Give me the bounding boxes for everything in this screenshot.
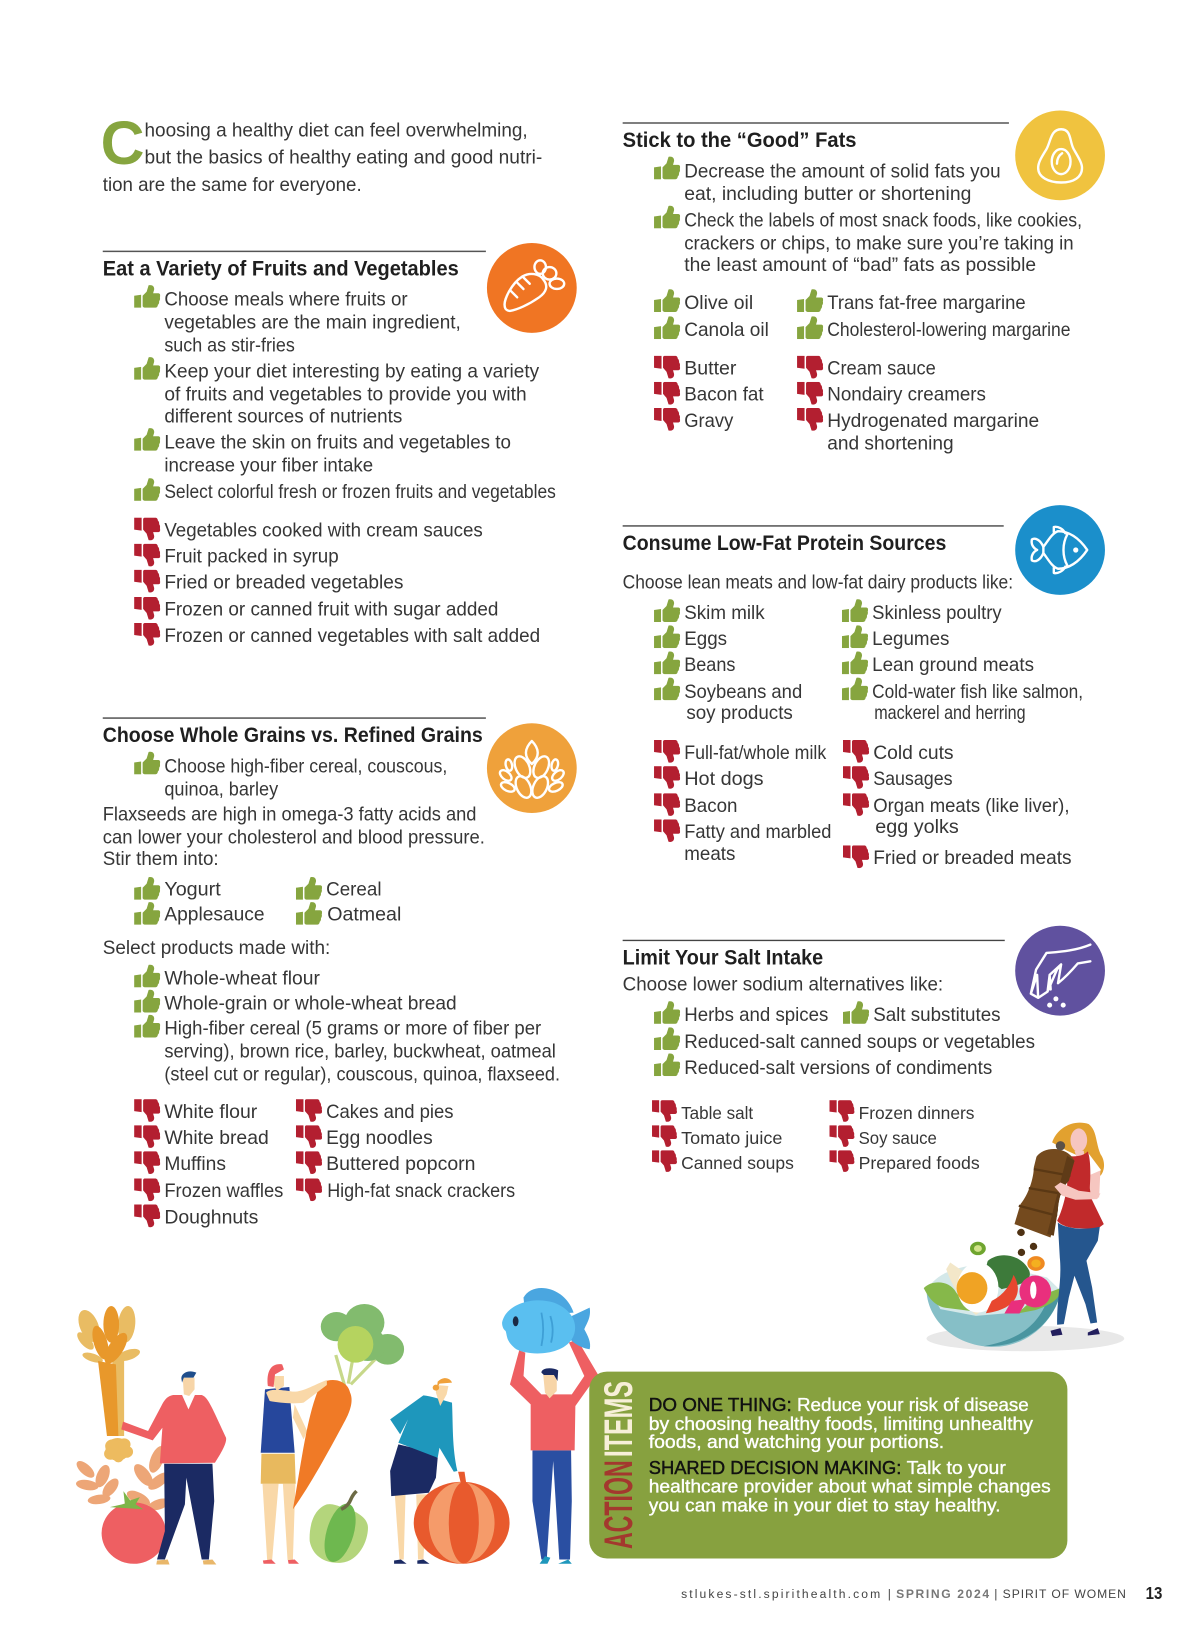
thumbs-up item: serving), brown rice, barley, buckwheat, oatmeal xyxy=(164,1041,556,1062)
thumbs-down item: Fried or breaded vegetables xyxy=(164,573,403,594)
thumbs-up item: such as stir-fries xyxy=(164,336,295,357)
thumbs-up item: of fruits and vegetables to provide you with xyxy=(164,385,527,406)
thumbs-down item xyxy=(134,1178,283,1202)
thumbs-up item: Choose high-fiber cereal, couscous, xyxy=(164,756,447,777)
thumbs-up item xyxy=(134,902,265,926)
thumbs-up item xyxy=(654,206,1082,276)
thumbs-down item xyxy=(654,408,734,432)
thumbs-down item: Cakes and pies xyxy=(326,1102,454,1123)
thumbs-up item: crackers or chips, to make sure you’re taking in xyxy=(684,233,1074,254)
thumbs-down item: Butter xyxy=(684,359,737,380)
thumbs-up item xyxy=(134,428,511,477)
thumbs-up item: Decrease the amount of solid fats you xyxy=(684,161,1001,182)
thumbs-down item: meats xyxy=(684,844,735,865)
text block: do one thing: Reduce your risk of disease xyxy=(797,1394,1029,1415)
footer: 13 xyxy=(1146,1583,1162,1603)
panel: whole grains xyxy=(103,718,577,1228)
vertical label: action items: ITEMS xyxy=(597,1381,641,1457)
thumbs-down item: Table salt xyxy=(681,1103,753,1123)
thumbs-down item xyxy=(797,408,1039,455)
thumbs-up item xyxy=(134,357,540,428)
thumbs-up item: Applesauce xyxy=(164,905,265,926)
thumbs-down item: Muffins xyxy=(164,1154,226,1175)
thumbs-up item: Canola oil xyxy=(684,320,769,341)
thumbs-down item xyxy=(654,740,827,764)
thumbs-down item xyxy=(654,356,737,380)
text: select products: Select products made with: xyxy=(103,938,330,959)
footer: stlukes-stl.spirithealth.com | xyxy=(681,1587,891,1601)
thumbs-down item xyxy=(797,356,936,380)
text block: flaxseeds: Flaxseeds are high in omega-3 fatty acids and xyxy=(103,804,476,825)
icon: carrot badge xyxy=(487,243,577,333)
thumbs-up item: Lean ground meats xyxy=(872,655,1034,676)
thumbs-down item: Cold cuts xyxy=(873,743,954,764)
intro text with drop cap: C xyxy=(101,109,145,178)
icon: hand pinching salt badge xyxy=(1015,926,1105,1016)
thumbs-down item xyxy=(654,382,764,406)
text block: do one thing: DO ONE THING: xyxy=(649,1394,792,1415)
text block: shared decision making: healthcare provider about what simple changes xyxy=(649,1476,1051,1497)
thumbs-down item: High-fat snack crackers xyxy=(327,1181,515,1202)
thumbs-up item xyxy=(134,1015,560,1085)
icon: fish badge xyxy=(1015,505,1105,595)
thumbs-down item: Doughnuts xyxy=(164,1207,258,1228)
thumbs-down item: Fruit packed in syrup xyxy=(164,546,339,567)
thumbs-up item: Skinless poultry xyxy=(872,603,1002,624)
illustration: salad bowl xyxy=(924,1229,1124,1351)
thumbs-up item: Check the labels of most snack foods, like cookies, xyxy=(684,210,1082,231)
thumbs-down item xyxy=(654,766,764,790)
intro text with drop cap: but the basics of healthy eating and good nutri- xyxy=(145,148,542,169)
thumbs-down item: White bread xyxy=(164,1128,269,1149)
thumbs-up item xyxy=(654,678,802,724)
thumbs-up item: soy products xyxy=(686,703,793,724)
thumbs-up item xyxy=(296,877,381,901)
illustration: man with wheat xyxy=(74,1305,226,1564)
text block: do one thing: foods, and watching your portions. xyxy=(649,1431,944,1452)
thumbs-up item: Cold-water fish like salmon, xyxy=(872,682,1083,703)
thumbs-up item: Skim milk xyxy=(684,603,765,624)
thumbs-up item xyxy=(842,678,1083,724)
thumbs-down item xyxy=(654,819,831,865)
thumbs-up item xyxy=(842,599,1002,624)
thumbs-up item: Leave the skin on fruits and vegetables to xyxy=(164,433,511,454)
footer xyxy=(681,1583,1162,1603)
thumbs-up item: Reduced-salt versions of condiments xyxy=(684,1058,992,1079)
thumbs-down item: Organ meats (like liver), xyxy=(873,796,1069,817)
text block: shared decision making: Talk to your xyxy=(907,1457,1006,1478)
panel: limit salt xyxy=(623,926,1105,1173)
thumbs-down item xyxy=(134,1205,258,1228)
thumbs-up item: the least amount of “bad” fats as possible xyxy=(684,255,1036,276)
text block: do one thing: by choosing healthy foods, limiting unhealthy xyxy=(649,1413,1034,1434)
thumbs-down item: Bacon fat xyxy=(684,385,764,406)
illustration: pepper xyxy=(310,1491,368,1565)
thumbs-down item: Hot dogs xyxy=(684,769,764,790)
icon: avocado badge xyxy=(1015,110,1105,200)
thumbs-up item xyxy=(654,652,735,676)
thumbs-up item xyxy=(843,1001,1001,1026)
thumbs-up item: Cereal xyxy=(326,880,381,901)
thumbs-up item: increase your fiber intake xyxy=(164,456,373,477)
thumbs-down item xyxy=(134,1151,226,1175)
thumbs-down item: Buttered popcorn xyxy=(326,1154,475,1175)
panel: good fats xyxy=(623,110,1105,455)
thumbs-up item xyxy=(296,902,401,926)
thumbs-up item: Soybeans and xyxy=(684,682,802,703)
thumbs-down item xyxy=(134,1099,258,1123)
thumbs-up item: Legumes xyxy=(872,629,949,650)
vertical label: action items: ACTION xyxy=(597,1460,641,1549)
heading: whole grains: Choose Whole Grains vs. Refined Grains xyxy=(103,723,483,747)
thumbs-down item: and shortening xyxy=(827,434,954,455)
thumbs-up item xyxy=(654,625,727,650)
panel: action items xyxy=(589,1372,1067,1558)
thumbs-down item: White flour xyxy=(164,1102,258,1123)
illustration: man holding fish xyxy=(502,1288,598,1564)
thumbs-down item: Soy sauce xyxy=(859,1128,937,1148)
thumbs-up item xyxy=(134,752,447,800)
thumbs-down item: egg yolks xyxy=(875,817,959,838)
intro text with drop cap: hoosing a healthy diet can feel overwhelming, xyxy=(145,121,528,142)
thumbs-down item xyxy=(829,1100,974,1123)
thumbs-down item: Cream sauce xyxy=(827,359,936,380)
thumbs-up item: quinoa, barley xyxy=(164,779,279,800)
thumbs-up item: Olive oil xyxy=(684,293,753,314)
thumbs-down item: Frozen or canned fruit with sugar added xyxy=(164,600,498,621)
thumbs-up item xyxy=(842,625,949,650)
thumbs-up item: different sources of nutrients xyxy=(164,407,402,428)
thumbs-down item: Fried or breaded meats xyxy=(873,848,1072,869)
thumbs-up item: Trans fat-free margarine xyxy=(827,293,1026,314)
thumbs-up item: Eggs xyxy=(684,629,727,650)
thumbs-up item: Cholesterol-lowering margarine xyxy=(827,320,1071,341)
heading: protein: Consume Low-Fat Protein Sources xyxy=(623,531,946,555)
text block: flaxseeds: can lower your cholesterol and blood pressure. xyxy=(103,827,485,848)
illustration: woman with pumpkin xyxy=(390,1378,510,1564)
thumbs-down item xyxy=(843,740,954,764)
thumbs-down item xyxy=(843,793,1069,838)
thumbs-up item: Salt substitutes xyxy=(873,1005,1001,1026)
thumbs-down item xyxy=(652,1150,794,1173)
icon: grain badge xyxy=(487,723,577,813)
text: sodium intro: Choose lower sodium alternatives like: xyxy=(623,975,943,996)
thumbs-down item: Frozen waffles xyxy=(164,1181,283,1202)
illustration: woman with carrot xyxy=(261,1304,404,1564)
text block: do one thing xyxy=(649,1394,1034,1452)
thumbs-up item: Yogurt xyxy=(164,880,221,901)
thumbs-up item: Whole-grain or whole-wheat bread xyxy=(164,993,457,1014)
footer: SPRING 2024 xyxy=(896,1587,989,1601)
thumbs-up item: mackerel and herring xyxy=(874,703,1026,724)
text block: shared decision making: SHARED DECISION MAKING: xyxy=(649,1457,901,1478)
thumbs-up item xyxy=(654,316,769,341)
thumbs-up item: vegetables are the main ingredient, xyxy=(164,313,461,334)
text: lean meats intro: Choose lean meats and low-fat dairy products like: xyxy=(623,573,1013,594)
thumbs-down item xyxy=(652,1100,753,1123)
text block: shared decision making xyxy=(649,1457,1051,1515)
thumbs-down item: Vegetables cooked with cream sauces xyxy=(164,520,483,541)
heading: fruits and vegetables: Eat a Variety of Fruits and Vegetables xyxy=(103,256,459,280)
thumbs-up item xyxy=(654,1001,828,1026)
thumbs-down item: Gravy xyxy=(684,411,734,432)
thumbs-up item: (steel cut or regular), couscous, quinoa, flaxseed. xyxy=(164,1064,560,1085)
heading: good fats: Stick to the “Good” Fats xyxy=(623,128,857,152)
thumbs-down item: Full-fat/whole milk xyxy=(684,743,827,764)
thumbs-up item: Keep your diet interesting by eating a variety xyxy=(164,362,540,383)
thumbs-down item xyxy=(134,1125,269,1149)
thumbs-up item xyxy=(134,285,461,357)
thumbs-up item: Choose meals where fruits or xyxy=(164,290,408,311)
thumbs-down item: Prepared foods xyxy=(859,1153,980,1173)
footer: | SPIRIT OF WOMEN xyxy=(994,1587,1126,1601)
thumbs-down item xyxy=(296,1125,433,1149)
thumbs-down item: Frozen or canned vegetables with salt added xyxy=(164,626,540,647)
panel: low-fat protein xyxy=(623,505,1105,869)
illustration: woman with pepper mill xyxy=(1014,1123,1104,1336)
thumbs-down item: Hydrogenated margarine xyxy=(827,411,1039,432)
thumbs-down item: Bacon xyxy=(684,796,737,817)
thumbs-up item xyxy=(654,289,753,314)
text block: flaxseeds xyxy=(103,804,485,870)
thumbs-up item: Whole-wheat flour xyxy=(164,968,321,989)
intro text with drop cap xyxy=(101,109,542,196)
thumbs-down item xyxy=(296,1099,454,1123)
thumbs-up item: Select colorful fresh or frozen fruits and vegetables xyxy=(164,482,556,503)
thumbs-down item xyxy=(654,793,737,817)
intro text with drop cap: tion are the same for everyone. xyxy=(103,175,362,196)
thumbs-up item: Beans xyxy=(684,655,735,676)
thumbs-down item xyxy=(843,766,953,790)
thumbs-down item: Egg noodles xyxy=(326,1128,433,1149)
thumbs-down item: Nondairy creamers xyxy=(827,385,986,406)
thumbs-down item xyxy=(829,1125,937,1148)
text block: flaxseeds: Stir them into: xyxy=(103,849,219,870)
thumbs-down item: Tomato juice xyxy=(681,1128,782,1148)
thumbs-up item: Oatmeal xyxy=(327,905,401,926)
thumbs-up item xyxy=(654,157,1001,205)
text block: shared decision making: you can make in your diet to stay healthy. xyxy=(649,1494,1001,1515)
thumbs-down item: Sausages xyxy=(873,769,953,790)
thumbs-up item: Herbs and spices xyxy=(684,1005,828,1026)
thumbs-down item: Frozen dinners xyxy=(859,1103,974,1123)
thumbs-down item: Canned soups xyxy=(681,1153,794,1173)
thumbs-down item: Fatty and marbled xyxy=(684,822,831,843)
heading: salt: Limit Your Salt Intake xyxy=(623,945,823,969)
thumbs-up item xyxy=(654,599,765,624)
thumbs-up item: Reduced-salt canned soups or vegetables xyxy=(684,1032,1035,1053)
thumbs-down item xyxy=(652,1125,782,1148)
panel: eat a variety of fruits and vegetables xyxy=(103,243,577,647)
thumbs-up item xyxy=(134,877,221,901)
thumbs-up item: High-fiber cereal (5 grams or more of fiber per xyxy=(164,1018,542,1039)
thumbs-up item: eat, including butter or shortening xyxy=(684,184,971,205)
